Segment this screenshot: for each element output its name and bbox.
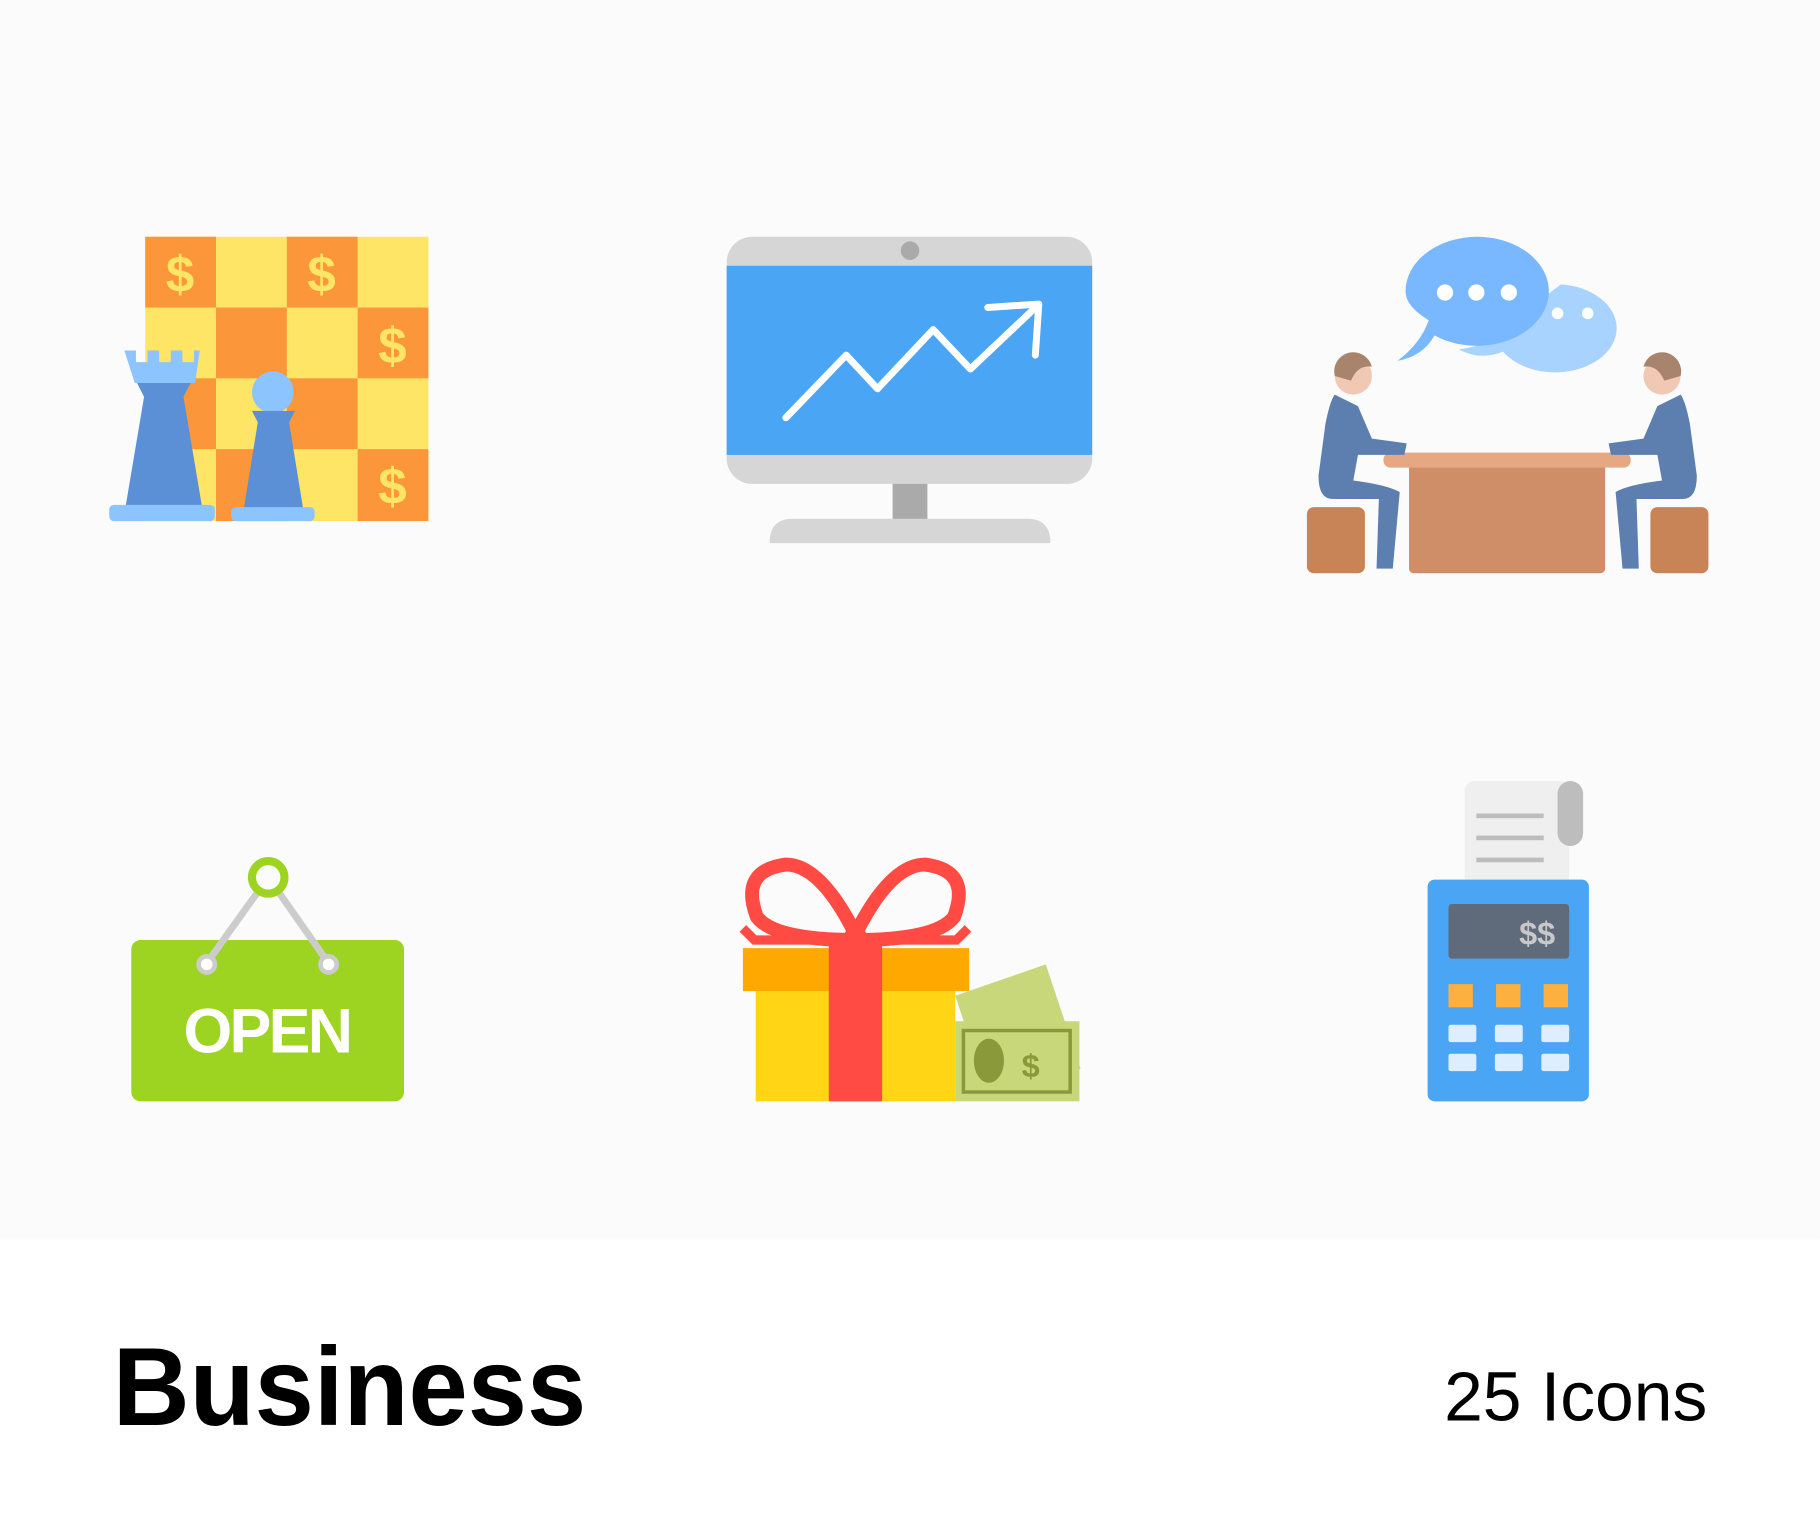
icon: calculator with receipt xyxy=(1428,781,1589,1101)
icon: chess strategy xyxy=(109,237,428,521)
title: Business xyxy=(113,1324,586,1449)
icon: chess strategy: $ xyxy=(378,317,407,374)
icon: gift and money: $ xyxy=(1022,1048,1040,1084)
icon: monitor with growth chart xyxy=(727,237,1092,543)
icon: chess strategy: $ xyxy=(378,458,407,515)
icon: chess strategy: $ xyxy=(307,245,336,302)
icon: gift and money xyxy=(743,865,1081,1101)
icon: chess strategy: $ xyxy=(166,245,194,302)
icon: open sign xyxy=(131,861,404,1101)
icon: business meeting xyxy=(1307,237,1708,573)
icon count: 25 Icons xyxy=(1444,1357,1707,1435)
icon: calculator with receipt: $$ xyxy=(1519,916,1555,952)
icon: open sign: OPEN xyxy=(184,997,353,1067)
